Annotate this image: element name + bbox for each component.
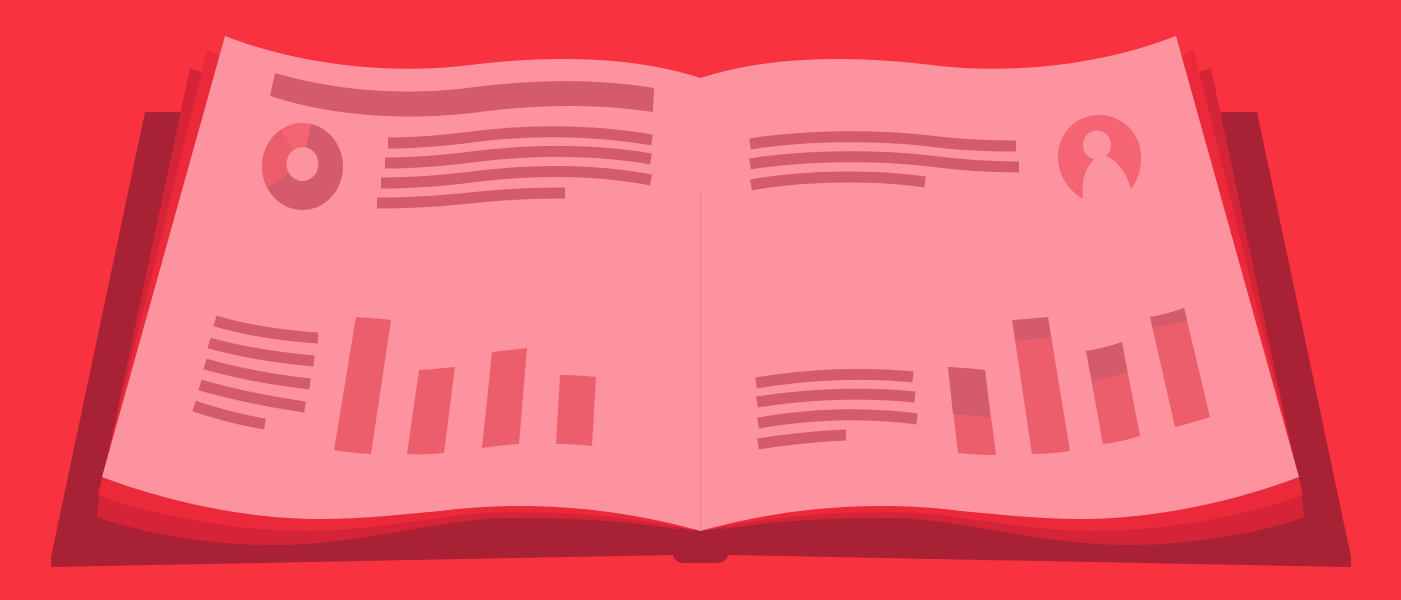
right lower text lines bbox=[756, 374, 917, 444]
right stacked bar chart bbox=[948, 308, 1210, 455]
right page stack bbox=[706, 50, 1304, 545]
left bar chart bbox=[334, 317, 596, 454]
left and right pages bbox=[102, 36, 1299, 531]
left lower text lines bbox=[194, 321, 318, 424]
left top text lines bbox=[377, 132, 652, 203]
left heading bar bbox=[270, 73, 654, 117]
right top text lines bbox=[750, 137, 1019, 185]
donut chart bbox=[262, 123, 343, 210]
left page stack bbox=[97, 50, 695, 545]
icon: person avatar bbox=[1058, 115, 1141, 199]
book cover bbox=[51, 112, 1351, 567]
